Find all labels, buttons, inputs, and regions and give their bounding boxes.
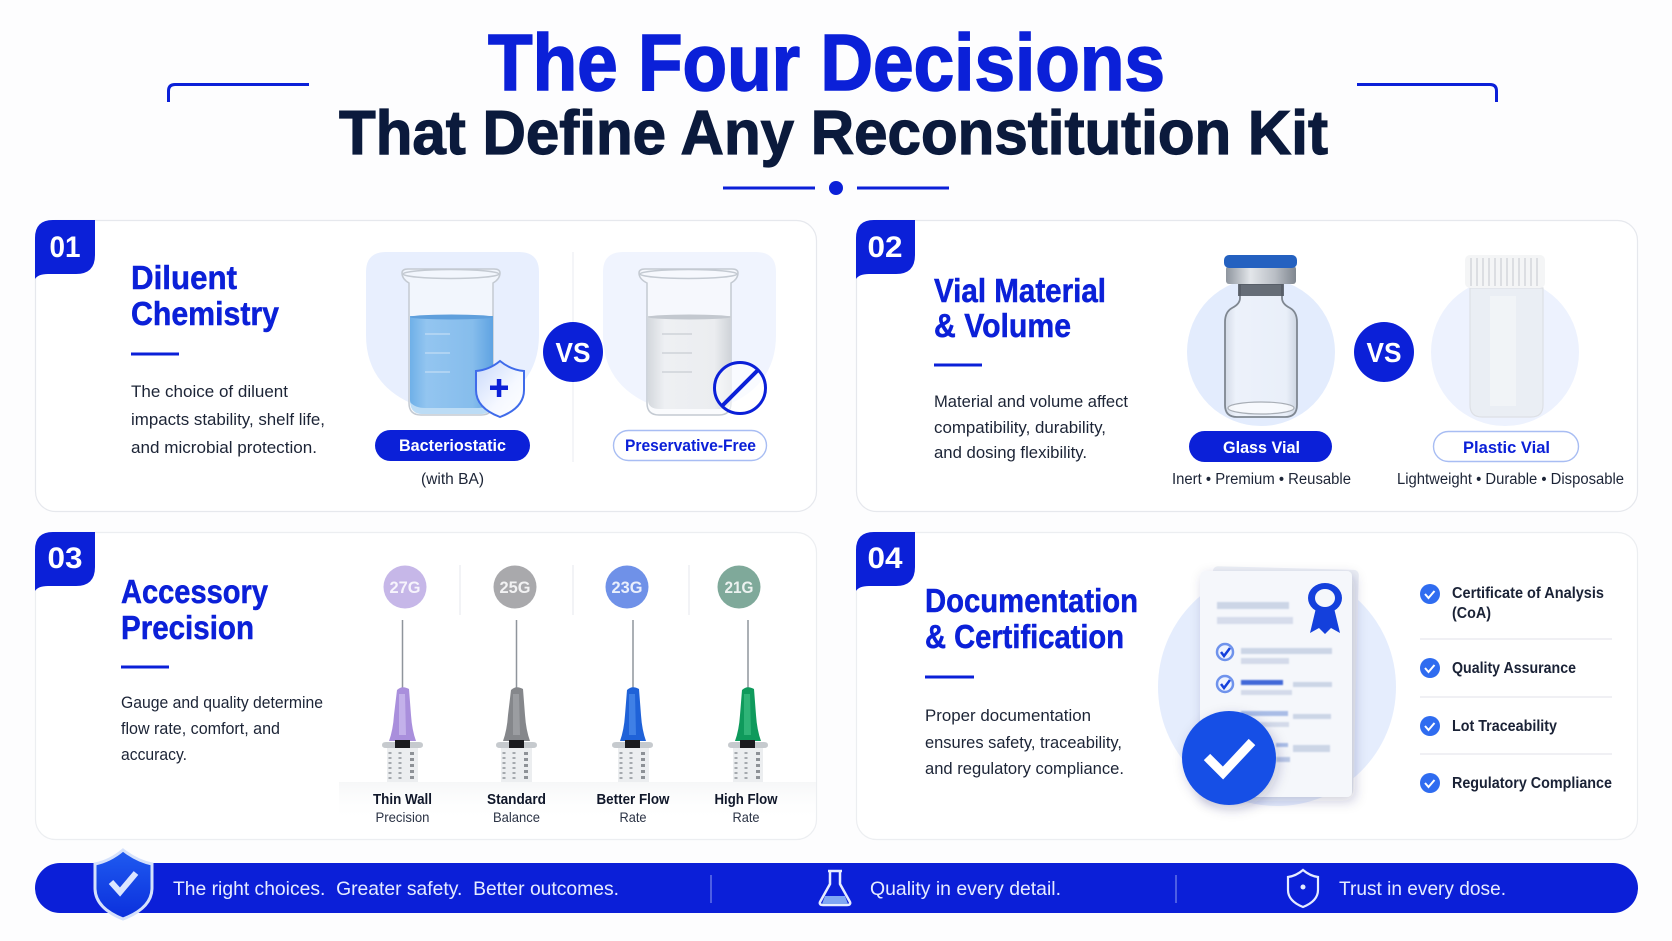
number badge 01	[35, 220, 95, 279]
icon: shield check	[95, 850, 152, 919]
item: quality assurance	[1420, 658, 1576, 678]
graduations	[662, 334, 692, 372]
number badge 04: 04	[868, 542, 903, 575]
number badge 04	[856, 532, 915, 591]
silver crimp	[1226, 266, 1296, 284]
item: quality assurance: Quality Assurance	[1452, 660, 1576, 677]
award rosette	[1308, 583, 1342, 634]
needle column: 27G: Thin Wall	[373, 791, 432, 808]
VS badge	[1354, 322, 1414, 382]
needle column: 27G: 27G	[390, 578, 420, 597]
beaker base	[410, 402, 493, 414]
pill: preservative-free	[614, 430, 766, 460]
verified check badge	[1182, 711, 1276, 805]
water surface	[410, 314, 493, 320]
card	[36, 220, 816, 512]
beaker glass	[402, 269, 500, 415]
heading: Accessory	[121, 573, 269, 610]
item: regulatory compliance	[1420, 773, 1612, 793]
description: accuracy.	[121, 745, 187, 764]
banner bar	[35, 863, 1638, 913]
needle column: 23G: Better Flow	[596, 791, 670, 808]
panel 04: documentation and certification	[856, 532, 1638, 840]
title bracket right	[1357, 84, 1496, 102]
description: and dosing flexibility.	[934, 443, 1087, 462]
heading rule	[925, 676, 974, 678]
title line 1: The Four Decisions	[488, 18, 1165, 107]
title bracket left	[168, 84, 309, 102]
document check marks	[1217, 644, 1233, 692]
sublabel: glass vial traits: Inert • Premium • Reusable	[1172, 471, 1351, 488]
pill: bacteriostatic: Bacteriostatic	[399, 436, 506, 455]
blue cap	[1224, 255, 1297, 268]
description: Proper documentation	[925, 706, 1091, 725]
banner message 1: The right choices. Greater safety. Better outcomes.	[173, 878, 619, 900]
backdrop circle	[1158, 568, 1396, 806]
item: certificate of analysis: Certificate of Analysis	[1452, 585, 1604, 602]
shield plus icon	[476, 361, 524, 417]
heading: Precision	[121, 609, 254, 646]
heading rule	[121, 666, 169, 668]
crimp neck	[1238, 284, 1284, 296]
water surface	[648, 314, 731, 320]
needle column: 21G	[714, 566, 778, 825]
number badge 02	[856, 220, 915, 279]
card	[856, 532, 1638, 840]
description: Gauge and quality determine	[121, 693, 323, 712]
heading: & Certification	[925, 618, 1124, 655]
panel 02: vial material and volume	[856, 220, 1638, 512]
heading: Vial Material	[934, 272, 1106, 309]
description	[934, 392, 1128, 462]
VS badge: VS	[1366, 337, 1402, 368]
panel 03: accessory precision	[35, 532, 816, 840]
description: compatibility, durability,	[934, 418, 1106, 437]
needle column: 25G: 25G	[500, 578, 530, 597]
heading	[121, 573, 269, 646]
heading: Chemistry	[131, 295, 280, 332]
pill: bacteriostatic	[375, 430, 530, 461]
cap ribs	[1471, 258, 1537, 286]
pill: plastic vial: Plastic Vial	[1463, 438, 1550, 457]
needle column: 21G: High Flow	[714, 791, 778, 808]
banner message 2: Quality in every detail.	[870, 878, 1061, 900]
sublabel: with BA: (with BA)	[421, 471, 484, 488]
item: lot traceability	[1420, 716, 1557, 736]
card	[856, 220, 1638, 512]
needle column: 21G: Rate	[732, 809, 760, 825]
bottom banner	[35, 850, 1638, 919]
option: bacteriostatic beaker	[366, 252, 539, 415]
description: flow rate, comfort, and	[121, 719, 280, 738]
needle column: 25G	[487, 566, 546, 825]
description: ensures safety, traceability,	[925, 733, 1122, 752]
front page	[1200, 571, 1352, 797]
checklist	[1420, 584, 1612, 793]
item: regulatory compliance: Regulatory Compliance	[1452, 775, 1612, 792]
banner message 3: Trust in every dose.	[1339, 878, 1506, 900]
pill: glass vial: Glass Vial	[1223, 438, 1300, 457]
document header lines	[1217, 602, 1332, 762]
item: lot traceability: Lot Traceability	[1452, 718, 1557, 735]
number badge 01: 01	[50, 231, 80, 264]
needle column: 23G: Rate	[620, 809, 647, 825]
VS badge	[543, 322, 603, 382]
heading: & Volume	[934, 307, 1071, 344]
heading	[131, 259, 280, 332]
needle column: 25G: Balance	[493, 809, 540, 825]
water	[410, 316, 493, 409]
heading rule	[131, 352, 179, 356]
description: impacts stability, shelf life,	[131, 410, 325, 429]
title divider	[723, 181, 949, 195]
description: and regulatory compliance.	[925, 759, 1124, 778]
description: and microbial protection.	[131, 438, 317, 457]
beaker rim	[640, 270, 737, 278]
needle column: 27G: Precision	[376, 809, 430, 825]
needle column: 27G	[373, 566, 432, 825]
number badge 03: 03	[48, 542, 82, 575]
pill: plastic vial	[1434, 432, 1578, 462]
heading	[934, 272, 1106, 344]
certificate illustration	[1158, 566, 1396, 806]
graduations	[425, 334, 450, 372]
description: Material and volume affect	[934, 392, 1128, 411]
number badge 03	[35, 532, 95, 591]
description	[131, 382, 325, 457]
card	[36, 532, 816, 840]
vial highlight	[1490, 296, 1516, 406]
vial body	[1470, 288, 1543, 417]
title	[339, 18, 1328, 168]
icon: small shield	[1288, 870, 1318, 907]
glass vial	[1187, 255, 1335, 426]
pill: glass vial	[1189, 431, 1332, 462]
ribbed cap	[1465, 255, 1545, 288]
no-preservative icon	[714, 362, 766, 414]
option: preservative-free beaker	[603, 252, 776, 415]
icon: flask	[820, 871, 850, 905]
vial body	[1225, 284, 1297, 417]
description	[121, 693, 323, 764]
needle column: 25G: Standard	[487, 791, 546, 808]
plastic vial	[1431, 255, 1579, 426]
beaker rim	[403, 270, 499, 278]
number badge 02: 02	[868, 231, 902, 264]
needle column: 21G: 21G	[724, 578, 754, 597]
heading: Diluent	[131, 259, 237, 296]
beaker glass	[639, 269, 738, 415]
title line 2: That Define Any Reconstitution Kit	[339, 99, 1328, 168]
center divider	[572, 252, 574, 462]
heading rule	[934, 364, 982, 366]
surface band	[339, 782, 816, 822]
panel 01: diluent chemistry	[35, 220, 816, 512]
gauge dividers	[460, 565, 689, 615]
heading: Documentation	[925, 582, 1138, 619]
needle column: 23G: 23G	[612, 578, 642, 597]
item: certificate of analysis	[1420, 584, 1604, 622]
description	[925, 706, 1124, 778]
VS badge: VS	[556, 337, 590, 368]
item: certificate of analysis: (CoA)	[1452, 605, 1491, 622]
water	[648, 316, 731, 409]
vial base	[1228, 402, 1294, 414]
back page	[1207, 566, 1359, 796]
sublabel: plastic vial traits: Lightweight • Durable • Disposable	[1397, 471, 1624, 488]
needle column: 23G	[596, 566, 670, 825]
heading	[925, 582, 1138, 655]
description: The choice of diluent	[131, 382, 288, 401]
pill: preservative-free: Preservative-Free	[625, 436, 756, 455]
